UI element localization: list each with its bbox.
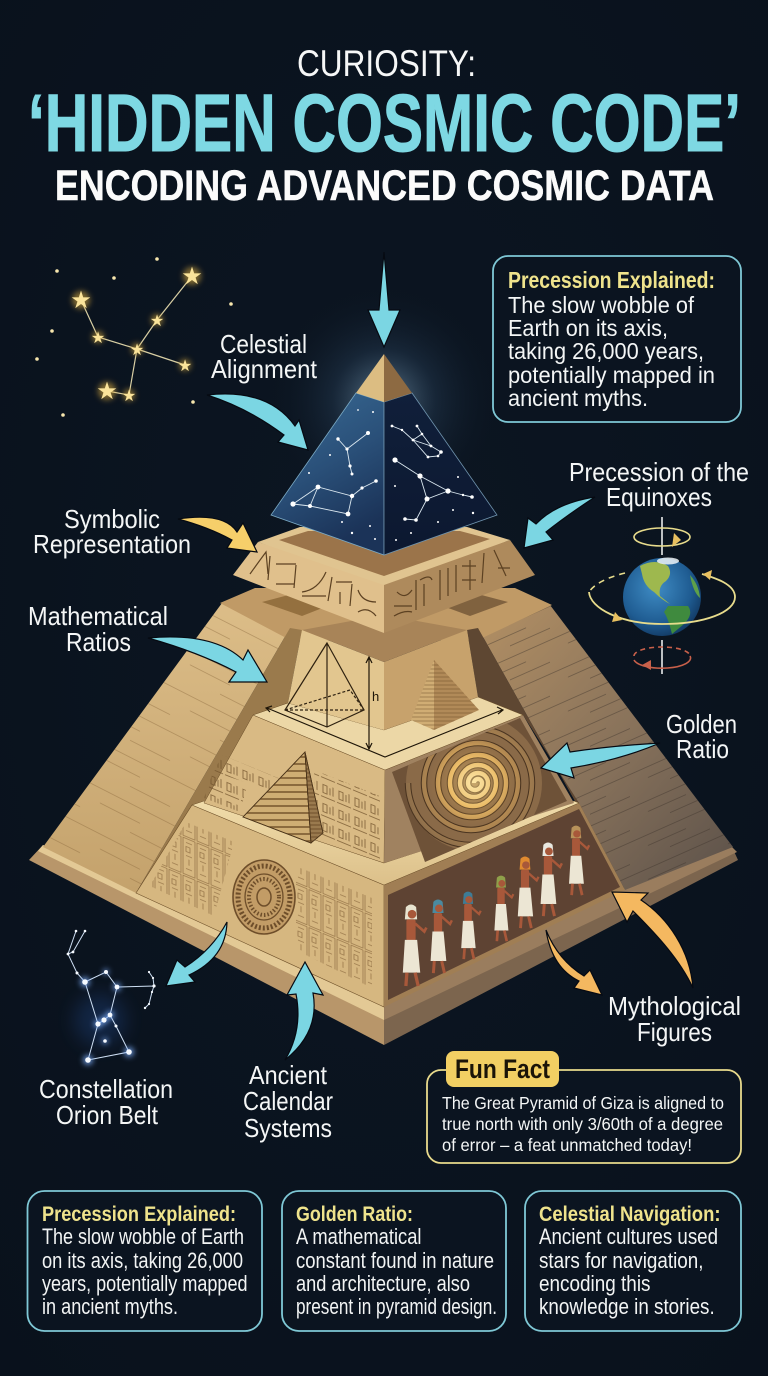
slab hieroglyph marks	[250, 550, 510, 616]
label: symbolic representation: Representation	[33, 529, 191, 559]
constellation: Orion	[67, 930, 156, 1065]
axis	[661, 517, 663, 674]
arrows	[148, 252, 693, 1060]
panel: precession explained bottom: Precession Explained:	[42, 1203, 236, 1226]
title block	[28, 43, 741, 210]
arrow: top apex	[368, 252, 400, 347]
panel: golden ratio: Golden Ratio:	[296, 1203, 413, 1226]
arrow: mythological figures down	[546, 930, 602, 995]
front of orbit ring	[589, 574, 735, 624]
label: ancient calendar systems	[243, 1060, 333, 1143]
fun fact tab: Fun Fact	[455, 1054, 550, 1084]
panel: precession explained bottom: on its axis, taking 26,000	[42, 1248, 243, 1273]
label: precession of the equinoxes: Precession of the	[569, 457, 749, 487]
dimension arrows	[266, 657, 503, 757]
tier 3 ledge	[192, 801, 579, 885]
constellation: top-left star chart: ★	[150, 311, 164, 330]
panel: celestial navigation: stars for navigation,	[539, 1248, 704, 1273]
bottom ring	[634, 647, 691, 668]
panel: precession explained top: ancient myths.	[508, 385, 648, 411]
panel: precession explained top	[493, 256, 741, 422]
panel: golden ratio: constant found in nature	[296, 1248, 494, 1273]
label: golden ratio: Ratio	[676, 734, 729, 764]
outer top platform	[220, 588, 552, 640]
tier 3	[136, 803, 625, 1007]
label: celestial alignment: Alignment	[211, 354, 318, 384]
constellation: top-left star chart: ★	[70, 286, 92, 314]
panel: celestial navigation	[525, 1191, 741, 1331]
arrow: ancient calendar	[285, 962, 323, 1060]
panel: fun fact: true north with only 3/60th of a degree	[442, 1114, 723, 1134]
label: celestial alignment	[211, 329, 318, 384]
label: mathematical ratios: Mathematical	[28, 601, 168, 631]
panel: golden ratio: present in pyramid design.	[296, 1294, 497, 1319]
panel: celestial navigation: encoding this	[539, 1271, 650, 1296]
panel: golden ratio	[282, 1191, 506, 1331]
arrow: constellation	[166, 922, 227, 986]
label: mathematical ratios: Ratios	[66, 627, 131, 657]
label: constellation orion belt: Orion Belt	[56, 1100, 159, 1130]
starry capstone pyramid	[271, 354, 497, 555]
label: constellation orion belt	[39, 1074, 173, 1130]
outer right face	[478, 605, 733, 890]
panel: precession explained top: taking 26,000 years,	[508, 338, 704, 364]
constellation: top-left star chart: ★	[91, 328, 105, 347]
constellation: top-left star chart: ★	[130, 340, 144, 359]
tier 2 right face with spiral	[384, 715, 574, 863]
outer left face	[43, 603, 290, 893]
slab right face	[384, 540, 535, 633]
mini stone pyramid	[411, 660, 479, 730]
arrow: mythological figures up	[612, 892, 693, 988]
label: ancient calendar systems: Systems	[244, 1113, 332, 1143]
constellation: top-left star chart: ★	[178, 356, 192, 375]
slab left face	[233, 542, 384, 633]
globe	[623, 558, 701, 636]
constellation: top-left star chart: ★	[122, 386, 136, 405]
panel: precession explained bottom: years, potentially mapped	[42, 1271, 248, 1296]
label: celestial alignment: Celestial	[220, 329, 307, 359]
panel: fun fact	[427, 1051, 741, 1163]
label: precession of the equinoxes: Equinoxes	[606, 482, 712, 512]
arrow: celestial alignment	[207, 394, 308, 450]
title: curiosity: CURIOSITY:	[297, 43, 476, 84]
panel: precession explained bottom: in ancient myths.	[42, 1294, 178, 1319]
mural figures	[403, 826, 589, 986]
panel: precession explained bottom: The slow wobble of Earth	[42, 1224, 244, 1249]
panel: celestial navigation: Celestial Navigation:	[539, 1203, 720, 1226]
panel: golden ratio: and architecture, also	[296, 1271, 470, 1296]
label: symbolic representation	[33, 504, 191, 559]
tier 3 right mural	[384, 803, 625, 1007]
constellation: top-left star chart	[35, 257, 233, 417]
panel: precession explained top: Precession Explained:	[508, 267, 715, 293]
inner cut walls	[136, 628, 302, 893]
panel: fun fact: of error – a feat unmatched today!	[442, 1135, 692, 1155]
panel: precession explained bottom	[28, 1191, 262, 1331]
golden spiral	[406, 715, 542, 851]
arrow: golden ratio	[541, 743, 660, 778]
top ring	[634, 528, 690, 546]
label: precession of the equinoxes	[569, 457, 749, 512]
panel: fun fact: The Great Pyramid of Giza is aligned to	[442, 1093, 724, 1113]
small striped pyramid	[243, 752, 323, 843]
panel: precession explained top: The slow wobble of	[508, 292, 695, 318]
label: constellation orion belt: Constellation	[39, 1074, 173, 1104]
label: mythological figures: Figures	[637, 1017, 712, 1047]
panel: golden ratio: A mathematical	[296, 1224, 422, 1249]
hieroglyph slab	[233, 527, 535, 633]
tier 3 left carved face	[136, 805, 384, 1007]
label: mythological figures	[608, 991, 741, 1047]
arrow: precession of equinoxes	[524, 497, 595, 548]
back of orbit ring	[589, 573, 625, 592]
panel: precession explained top: potentially mapped in	[508, 362, 715, 388]
label: golden ratio	[666, 709, 737, 764]
panel: celestial navigation: knowledge in stories.	[539, 1294, 715, 1319]
left face constellations	[290, 409, 378, 540]
tier 1 top ledge	[253, 697, 523, 770]
label: mathematical ratios	[28, 601, 168, 657]
constellation: top-left star chart: ★	[181, 262, 203, 290]
ring arrowheads	[612, 533, 712, 622]
label: golden ratio: Golden	[666, 709, 737, 739]
arrow: mathematical ratios	[148, 637, 267, 682]
label: mythological figures: Mythological	[608, 991, 741, 1021]
glow behind apex	[269, 285, 499, 515]
panel: precession explained top: Earth on its axis,	[508, 315, 668, 341]
panel: celestial navigation: Ancient cultures used	[539, 1224, 718, 1249]
plinth	[29, 845, 738, 1045]
tier 2 left face	[204, 715, 385, 863]
pyramid illustration	[29, 285, 738, 1045]
label: ancient calendar systems: Ancient	[249, 1060, 328, 1090]
sandstone tip	[356, 354, 384, 402]
column	[288, 615, 478, 730]
dimension label h: h	[372, 689, 379, 704]
right face constellations	[391, 425, 474, 541]
calendar disc	[233, 860, 295, 934]
constellation: top-left star chart: ★	[96, 377, 118, 405]
slab top	[258, 527, 510, 590]
wireframe pyramid	[285, 643, 364, 727]
arrow: symbolic representation	[178, 517, 257, 552]
label: ancient calendar systems: Calendar	[243, 1086, 333, 1116]
label: symbolic representation: Symbolic	[64, 504, 160, 534]
icon: earth with precession rings	[589, 517, 735, 674]
